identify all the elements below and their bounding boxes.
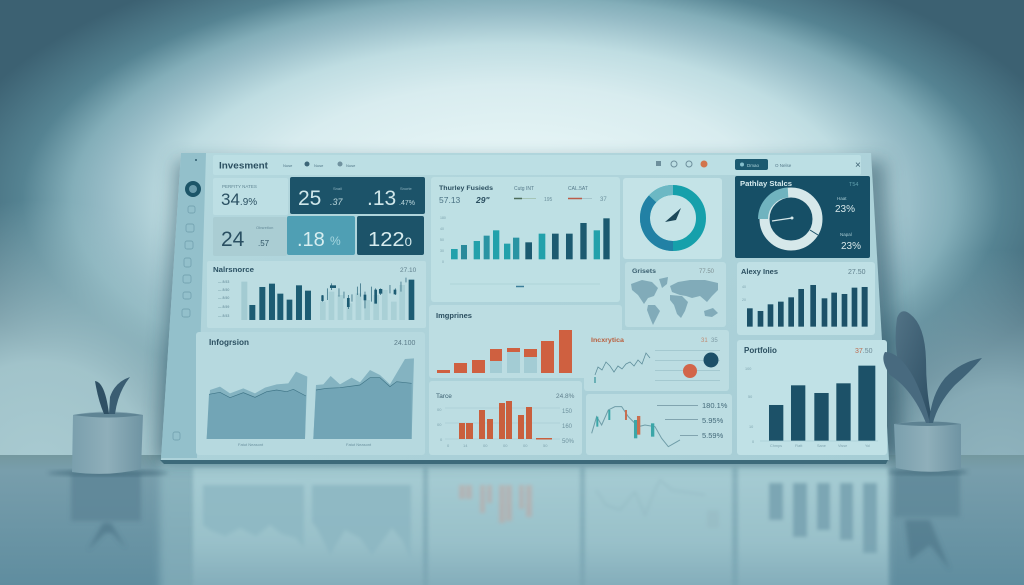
panel: Tarce grouped bars: 24.8% — [556, 393, 575, 400]
panel: Tarce grouped bars: 50 — [543, 443, 548, 448]
panel: Thurley Fusieds bar chart: 40 — [440, 227, 444, 231]
panel: Grisets world map: 77.50 — [699, 269, 715, 275]
header bar — [213, 155, 861, 175]
panel: Tarce grouped bars: 50% — [562, 439, 575, 445]
dashboard board — [160, 153, 889, 464]
panel: Portfolio bar chart: Fiatt — [795, 444, 803, 448]
stat card: 24 .57: 24 — [221, 228, 245, 251]
panel: Portfolio bar chart: Chmps — [770, 444, 782, 448]
tabs row: O Nelse — [775, 163, 792, 168]
panel: Alexy Ines bar chart: 40 — [742, 285, 746, 289]
panel: donut gauge — [623, 178, 722, 259]
panel: Thurley Fusieds bar chart: 37 — [600, 197, 607, 203]
panel: Thurley Fusieds bar chart: 0 — [442, 260, 444, 264]
panel: Imgprines stacked bars — [429, 305, 622, 378]
stat card: 25 and 13 — [290, 177, 425, 214]
panel: candlestick chart: 180.1% — [702, 401, 728, 410]
panel: Pathlay Stalcs dark donut — [735, 176, 870, 258]
dashboard shadow — [158, 160, 903, 460]
panel: Tarce grouped bars: 00 — [483, 443, 488, 448]
panel: Tarce grouped bars — [429, 381, 582, 455]
panel: Portfolio bar chart: 37.50 — [855, 348, 873, 355]
sidebar — [161, 153, 206, 458]
panel: Tarce grouped bars: 150 — [562, 409, 573, 415]
panel: Portfolio bar chart: 0 — [752, 440, 754, 444]
panel: Grisets world map — [625, 262, 726, 327]
stat card: 34.9% — [213, 178, 288, 215]
panel: Grisets world map: Grisets — [632, 268, 656, 275]
stat card: 122: 122 0 — [368, 229, 412, 251]
panel: Tarce grouped bars: 00 — [437, 422, 442, 427]
stat card: 25 and 13: .37 — [330, 197, 344, 207]
header bar: Nuse — [346, 163, 356, 168]
panel: candlestick chart: 5.59% — [702, 431, 724, 440]
stat card: 24 .57: Obsretion — [256, 225, 273, 230]
panel: Nalrsnorce bars and candles — [207, 261, 426, 328]
stat card: 18% — [287, 216, 355, 255]
stat card: 18%: % — [330, 234, 341, 248]
header bar: Nuse — [283, 163, 293, 168]
stat card: 24 .57 — [213, 217, 287, 256]
panel: Thurley Fusieds bar chart: Thurley Fusieds — [439, 185, 493, 192]
icon: left potted plant — [48, 377, 168, 476]
panel: Infogrsion area charts: Infogrsion — [209, 338, 249, 347]
header bar: Invesment — [219, 160, 268, 170]
panel: Imgprines stacked bars: Imgprines — [436, 313, 472, 320]
panel: Thurley Fusieds bar chart: 57.13 — [439, 195, 461, 205]
panel: Nalrsnorce bars and candles: — 8:53 — [218, 314, 229, 318]
panel: Nalrsnorce bars and candles: — 8:59 — [218, 305, 229, 309]
header bar: Nuse — [314, 163, 324, 168]
stat card: 25 and 13: Snail — [333, 186, 342, 191]
floor with reflections — [0, 455, 1024, 585]
panel: Thurley Fusieds bar chart — [431, 177, 620, 302]
panel: Thurley Fusieds bar chart: 50 — [440, 238, 444, 242]
panel: candlestick chart — [586, 394, 732, 455]
panel: Tarce grouped bars: 14 — [463, 443, 468, 448]
panel: Portfolio bar chart: 100 — [745, 367, 751, 371]
panel: Portfolio bar chart: Sane — [817, 444, 826, 448]
panel: Tarce grouped bars: 00 — [523, 443, 528, 448]
stat card: 34.9%: PERFITY NATES — [222, 184, 257, 189]
panel: Portfolio bar chart — [737, 340, 887, 455]
icon: right potted plant — [883, 311, 982, 475]
panel: Tarce grouped bars: Tarce — [436, 393, 452, 400]
panel: Thurley Fusieds bar chart: Cutg INT — [514, 186, 534, 192]
panel: Alexy Ines bar chart: 27.50 — [848, 269, 866, 276]
panel: Tarce grouped bars: 00 — [503, 443, 508, 448]
wall background — [0, 0, 1024, 460]
tabs row: Dmao — [747, 163, 760, 168]
tabs row: × — [855, 160, 861, 171]
panel: Infogrsion area charts: Fatut Neasont — [346, 442, 372, 447]
panel: Infogrsion area charts — [196, 332, 425, 455]
panel: Tarce grouped bars: 00 — [437, 407, 442, 412]
panel: Nalrsnorce bars and candles: — 8:53 — [218, 280, 229, 284]
stat card: 18%: .18 — [297, 229, 325, 251]
panel: Pathlay Stalcs dark donut: T54 — [849, 182, 858, 188]
panel: Portfolio bar chart: Yol — [865, 444, 870, 448]
panel: Thurley Fusieds bar chart: 29" — [475, 195, 490, 205]
panel: Incxrytica sparkline and dots — [584, 330, 729, 391]
panel: Thurley Fusieds bar chart: 180 — [440, 216, 446, 220]
panel: Pathlay Stalcs dark donut: 23% — [841, 241, 861, 252]
panel: Thurley Fusieds bar chart: 30 — [440, 249, 444, 253]
panel: Portfolio bar chart: 50 — [748, 395, 752, 399]
panel: Alexy Ines bar chart: 20 — [742, 298, 746, 302]
panel: Pathlay Stalcs dark donut: Haat — [837, 196, 847, 201]
stat card: 25 and 13: .13 — [367, 187, 396, 210]
panel: Pathlay Stalcs dark donut: Napal — [840, 232, 852, 237]
stat card: 122 — [357, 216, 424, 255]
panel: Portfolio bar chart: 10 — [749, 425, 753, 429]
panel: Tarce grouped bars: 160 — [562, 424, 573, 430]
panel: Nalrsnorce bars and candles: 27.10 — [400, 267, 417, 274]
stat card: 25 and 13: 25 — [298, 187, 321, 210]
stat card: 34.9%: 34.9% — [221, 190, 257, 209]
panel: Incxrytica sparkline and dots: 31 — [701, 338, 708, 344]
panel: Pathlay Stalcs dark donut: Pathlay Stalcs — [740, 179, 792, 188]
panel: Nalrsnorce bars and candles: — 8:50 — [218, 288, 229, 292]
panel: Alexy Ines bar chart — [737, 262, 875, 335]
panel: Portfolio bar chart: Visse — [838, 444, 847, 448]
panel: Nalrsnorce bars and candles: Nalrsnorce — [213, 265, 254, 274]
panel: Thurley Fusieds bar chart: 195 — [544, 197, 553, 203]
panel: Alexy Ines bar chart: Alexy Ines — [741, 267, 778, 276]
panel: Incxrytica sparkline and dots: Incxrytica — [591, 337, 624, 344]
panel: Infogrsion area charts: 24.100 — [394, 340, 416, 347]
stat card: 24 .57: .57 — [258, 239, 270, 248]
stat card: 25 and 13: Snorte — [400, 186, 413, 191]
tabs row — [735, 159, 861, 171]
panel: Tarce grouped bars: 0 — [447, 443, 450, 448]
panel: Incxrytica sparkline and dots: 35 — [711, 338, 718, 344]
stat card: 25 and 13: .47% — [399, 200, 415, 207]
panel: Thurley Fusieds bar chart: CAL.5AT — [568, 186, 588, 192]
panel: Tarce grouped bars: 0 — [440, 437, 443, 442]
panel: Portfolio bar chart: Portfolio — [744, 346, 777, 355]
panel: Infogrsion area charts: Fatut Neasont — [238, 442, 264, 447]
panel: Nalrsnorce bars and candles: — 8:50 — [218, 296, 229, 300]
panel: Pathlay Stalcs dark donut: 23% — [835, 204, 855, 215]
panel: candlestick chart: 5.95% — [702, 416, 724, 425]
